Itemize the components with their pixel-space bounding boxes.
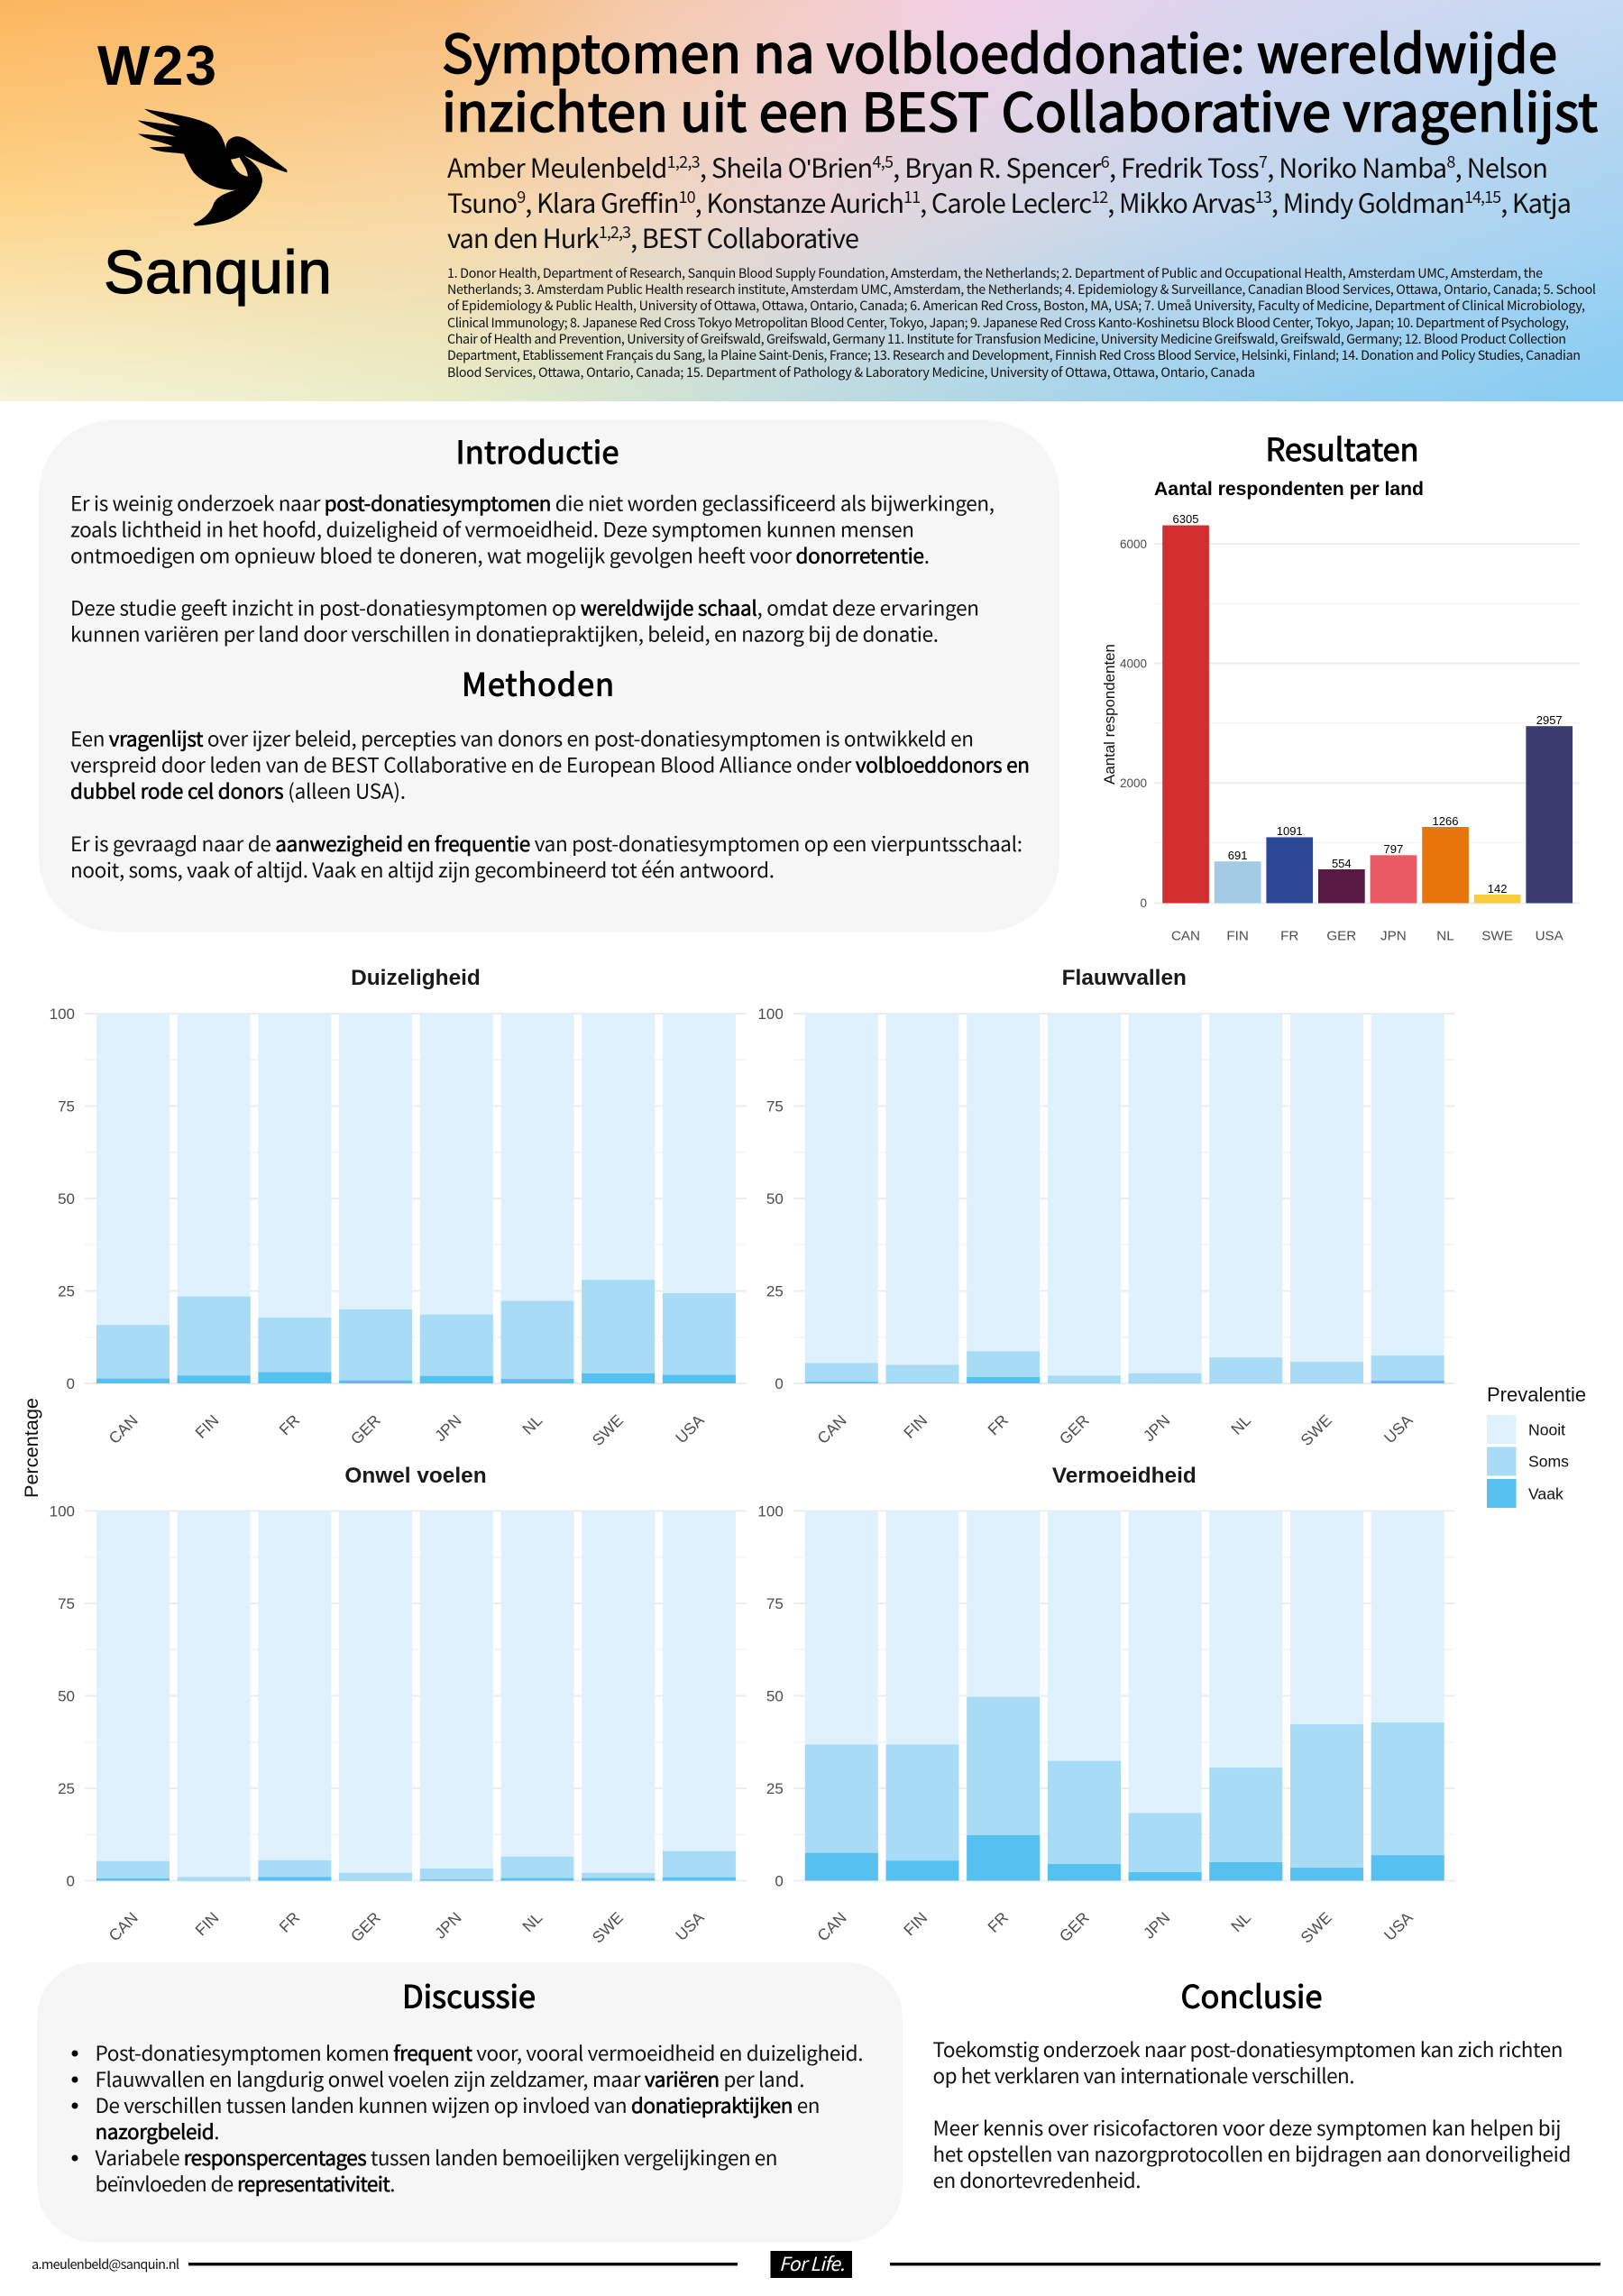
bars: Nooit, Soms, Vaak per land [805, 1511, 1444, 1881]
y axis labels: 75 [58, 1098, 75, 1115]
stacked bar chart: Flauwvallen [757, 966, 1455, 1449]
x axis labels: USA [1536, 929, 1564, 943]
bullet list: discussie: Variabele responspercentages tussen landen bemoeilijken vergelijkingen en [96, 2143, 777, 2172]
x axis labels [813, 1908, 1417, 1947]
affiliations: 1. Donor Health, Department of Research, Sanquin Blood Supply Foundation, Amsterdam, the Netherlands; 2. Department of Public and Occupational Health, Amsterdam UMC, Amsterdam, the [447, 263, 1543, 282]
bullet list: discussie: nazorgbeleid. [96, 2117, 220, 2145]
poster code W23: W23 [97, 35, 216, 97]
title: Symptomen na volbloeddonatie: wereldwijde [442, 13, 1557, 88]
value labels: 554 [1332, 857, 1352, 870]
x axis labels: SWE [1481, 929, 1513, 943]
x axis labels: SWE [589, 1908, 627, 1947]
y axis labels: 100 [50, 1006, 75, 1023]
x axis labels [105, 1410, 708, 1449]
authors: 1,2,3 [599, 220, 631, 243]
text block: conclusie: en donortevredenheid. [932, 2165, 1142, 2194]
x axis labels: NL [518, 1411, 546, 1438]
x axis labels: CAN [105, 1411, 142, 1447]
bullet list: discussie: Post-donatiesymptomen komen frequent voor, vooral vermoeidheid en duizeligheid. [96, 2038, 864, 2067]
heading: Introductie: Introductie [456, 427, 619, 473]
x axis labels: FR [984, 1908, 1012, 1936]
stacked bar chart: Duizeligheid [50, 966, 747, 1449]
panel: introductie en methoden [39, 420, 1059, 932]
icon: Sanquin pelican logo [138, 109, 287, 226]
x axis labels: GER [1326, 929, 1356, 943]
x axis labels: FIN [1226, 929, 1249, 943]
y axis labels: 0 [1140, 896, 1147, 910]
title: inzichten uit een BEST Collaborative vragenlijst [442, 70, 1598, 146]
legend: Prevalentie: Vaak [1528, 1485, 1563, 1503]
x axis labels: FR [276, 1411, 303, 1438]
y axis labels: 2000 [1120, 776, 1147, 790]
bullet list: discussie [72, 2038, 864, 2198]
authors: , Carole Leclerc [920, 183, 1092, 221]
bars: Nooit, Soms, Vaak per land [805, 1014, 1444, 1383]
badge: For Life.: For Life. [779, 2250, 845, 2277]
chart title: Aantal respondenten per land [1154, 479, 1424, 500]
authors: 9 [517, 185, 526, 208]
y axis labels [50, 1006, 75, 1392]
x axis labels: FR [1280, 929, 1298, 943]
y axis labels: 50 [766, 1688, 784, 1704]
y axis labels: 100 [50, 1502, 75, 1520]
text block: conclusie: het opstellen van nazorgprotocollen en bijdragen aan donorveiligheid [932, 2139, 1571, 2168]
authors: 11 [903, 185, 921, 208]
x axis labels: JPN [431, 1908, 465, 1942]
y axis labels: 0 [67, 1375, 75, 1392]
chart title: Vermoeidheid [1052, 1464, 1197, 1488]
x axis labels: USA [672, 1410, 708, 1446]
affiliations: Netherlands; 3. Amsterdam Public Health research institute, Amsterdam UMC, Amsterdam, the Netherlands; 4. Epidemiology & Surveillance, Canadian Blood Services, Ottawa, Ontario, Canada; 5. School [447, 280, 1596, 298]
x axis labels: GER [347, 1908, 384, 1945]
y axis labels [50, 1502, 75, 1890]
authors: , Sheila O'Brien [700, 148, 873, 186]
value labels [1173, 512, 1563, 895]
x axis labels [1171, 929, 1564, 943]
x axis labels: JPN [431, 1411, 465, 1445]
authors: 13 [1255, 185, 1272, 208]
y axis title: Aantal respondenten [1101, 644, 1118, 785]
y axis labels [757, 1502, 784, 1890]
chart title: Onwel voelen [344, 1464, 487, 1488]
header gradient background [0, 0, 1623, 401]
y axis labels [757, 1006, 784, 1392]
y axis labels: 100 [757, 1006, 784, 1023]
authors: 14,15 [1464, 185, 1501, 208]
text block: methoden [70, 723, 1030, 884]
authors: , BEST Collaborative [630, 218, 859, 256]
heading: Discussie: Discussie [402, 1971, 536, 2016]
y axis labels: 25 [766, 1780, 784, 1797]
bullet list: discussie: Flauwvallen en langdurig onwel voelen zijn zeldzamer, maar variëren per land. [96, 2064, 804, 2093]
text block: introductie: zoals lichtheid in het hoofd, duizeligheid of vermoeidheid. Deze symptomen kunnen mensen [70, 514, 914, 543]
x axis labels: NL [1227, 1908, 1254, 1935]
value labels: 2957 [1536, 713, 1563, 727]
chart title: Flauwvallen [1062, 966, 1187, 990]
x axis labels: FR [276, 1908, 303, 1936]
legend: Prevalentie: Nooit [1528, 1421, 1565, 1439]
x axis labels: JPN [1140, 1411, 1173, 1445]
text block: conclusie: Toekomstig onderzoek naar post-donatiesymptomen kan zich richten [932, 2034, 1563, 2063]
bars: Nooit, Soms, Vaak per land [96, 1511, 736, 1881]
y axis labels: 75 [766, 1595, 784, 1612]
authors: Tsuno [447, 183, 518, 221]
stacked bar chart: Onwel voelen [50, 1464, 747, 1947]
authors: , Bryan R. Spencer [893, 148, 1102, 186]
y axis labels: 0 [67, 1872, 75, 1890]
x axis labels: SWE [589, 1411, 627, 1449]
affiliations: Department, Etablissement Français du Sang, la Plaine Saint-Denis, France; 13. Research and Development, Finnish Red Cross Blood Service, Helsinki, Finland; 14. Donation and Policy Studies, Canadian [447, 345, 1581, 364]
text block: methoden: nooit, soms, vaak of altijd. Vaak en altijd zijn gecombineerd tot één antwoord. [70, 855, 775, 884]
y axis labels: 50 [58, 1688, 75, 1704]
authors: , Mikko Arvas [1107, 183, 1256, 221]
x axis labels: NL [1436, 929, 1454, 943]
legend: Prevalentie [1487, 1383, 1586, 1508]
stacked bar chart: Vermoeidheid [757, 1464, 1455, 1947]
x axis labels: FR [984, 1411, 1012, 1438]
chart title: Duizeligheid [351, 966, 481, 990]
footer line right [890, 2263, 1600, 2265]
y axis labels: 25 [58, 1780, 75, 1797]
x axis labels: GER [1056, 1411, 1093, 1448]
x axis labels: SWE [1297, 1411, 1335, 1449]
x axis labels: USA [672, 1908, 708, 1944]
authors: 4,5 [872, 150, 894, 173]
x axis labels: SWE [1297, 1908, 1335, 1947]
value labels: 797 [1384, 842, 1403, 856]
footer: email: a.meulenbeld@sanquin.nl [32, 2255, 179, 2273]
authors: , Nelson [1455, 148, 1548, 186]
x axis labels: USA [1380, 1908, 1417, 1944]
x axis labels: NL [518, 1908, 546, 1935]
text block: methoden: verspreid door leden van de BEST Collaborative en de European Blood Alliance onder volbloeddonors en [70, 750, 1030, 779]
authors: 1,2,3 [667, 150, 701, 173]
authors: Amber Meulenbeld [447, 148, 667, 186]
authors: 12 [1091, 185, 1108, 208]
y axis labels: 25 [58, 1282, 75, 1300]
bar chart: aantal respondenten per land [1101, 479, 1580, 943]
authors: 6 [1101, 150, 1110, 173]
affiliations [447, 263, 1596, 381]
x axis labels: CAN [1171, 929, 1200, 943]
authors: 10 [679, 185, 696, 208]
y axis labels: 50 [58, 1190, 75, 1208]
authors: , Noriko Namba [1267, 148, 1447, 186]
authors: , Konstanze Aurich [695, 183, 904, 221]
authors: 8 [1446, 150, 1455, 173]
authors: , Klara Greffin [525, 183, 680, 221]
affiliations: Chair of Health and Prevention, University of Greifswald, Greifswald, Germany 11. Institute for Transfusion Medicine, University Medicine Greifswald, Greifswald, Germany; 12. Blood Product Collection [447, 329, 1566, 348]
text block: methoden: dubbel rode cel donors (alleen USA). [70, 776, 406, 804]
value labels: 6305 [1173, 512, 1198, 526]
x axis labels: USA [1380, 1410, 1417, 1446]
text block: introductie: kunnen variëren per land door verschillen in donatiepraktijken, beleid, en nazorg bij de donatie. [70, 619, 939, 647]
title [442, 13, 1598, 146]
x axis labels [813, 1410, 1417, 1449]
panel: discussie [37, 1962, 903, 2242]
authors: , Katja [1500, 183, 1572, 221]
x axis labels: FIN [191, 1411, 223, 1442]
authors: , Mindy Goldman [1271, 183, 1465, 221]
text block: introductie: ontmoedigen om opnieuw bloed te doneren, wat mogelijk gevolgen heeft voor donorretentie. [70, 541, 930, 570]
value labels: 1266 [1433, 814, 1458, 828]
x axis labels: JPN [1140, 1908, 1173, 1942]
x axis labels: JPN [1380, 929, 1407, 943]
x axis labels: FIN [900, 1411, 931, 1442]
footer line left [188, 2263, 738, 2265]
value labels: 1091 [1277, 824, 1303, 838]
affiliations: Blood Services, Ottawa, Ontario, Canada; 15. Department of Pathology & Laboratory Medicine, University of Ottawa, Ottawa, Ontario, Canada [447, 363, 1255, 381]
bars [1162, 525, 1573, 904]
heading: Methoden: Methoden [462, 660, 614, 705]
text block: conclusie [932, 2034, 1571, 2194]
Sanquin wordmark: Sanquin [104, 238, 332, 307]
x axis labels: CAN [813, 1411, 850, 1447]
y axis labels: 100 [757, 1502, 784, 1520]
y axis labels: 50 [766, 1190, 784, 1208]
y axis labels: 75 [58, 1595, 75, 1612]
text block: conclusie: Meer kennis over risicofactoren voor deze symptomen kan helpen bij [932, 2113, 1562, 2142]
bullet list: discussie: De verschillen tussen landen kunnen wijzen op invloed van donatiepraktijken en [96, 2090, 821, 2119]
affiliations: Clinical Immunology; 8. Japanese Red Cross Tokyo Metropolitan Blood Center, Tokyo, Japan; 9. Japanese Red Cross Kanto-Koshinetsu Block Blood Center, Tokyo, Japan; 10. Department of Psychology, [447, 313, 1569, 332]
x axis labels: CAN [105, 1908, 142, 1944]
text block: introductie [70, 489, 995, 647]
bullet list: discussie: beïnvloeden de representativiteit. [96, 2169, 395, 2198]
y axis labels: 75 [766, 1098, 784, 1115]
text block: introductie: Er is weinig onderzoek naar post-donatiesymptomen die niet worden geclassificeerd als bijwerkingen, [70, 489, 995, 518]
text block: methoden: Een vragenlijst over ijzer beleid, percepties van donors en post-donatiesymptomen is ontwikkeld en [70, 723, 974, 752]
value labels: 142 [1488, 882, 1507, 895]
authors: , Fredrik Toss [1109, 148, 1260, 186]
x axis labels: NL [1227, 1411, 1254, 1438]
x axis labels [105, 1908, 708, 1947]
y axis labels: 0 [775, 1872, 784, 1890]
heading: Conclusie: Conclusie [1181, 1971, 1322, 2016]
authors: 7 [1259, 150, 1268, 173]
text block: methoden: Er is gevraagd naar de aanwezigheid en frequentie van post-donatiesymptomen op een vierpuntsschaal: [70, 829, 1022, 858]
x axis labels: GER [347, 1411, 384, 1448]
text block: conclusie: op het verklaren van internationale verschillen. [932, 2061, 1354, 2089]
y axis title: Percentage: Percentage [20, 1398, 42, 1498]
y axis labels [1120, 537, 1147, 910]
legend: Prevalentie: Soms [1528, 1453, 1569, 1471]
x axis labels: GER [1056, 1908, 1093, 1945]
authors: van den Hurk [447, 218, 600, 256]
y axis labels: 6000 [1120, 537, 1147, 551]
y axis labels: 4000 [1120, 657, 1147, 671]
y axis labels: 25 [766, 1282, 784, 1300]
text block: introductie: Deze studie geeft inzicht in post-donatiesymptomen op wereldwijde schaal, omdat deze ervaringen [70, 593, 979, 622]
heading: Resultaten: Resultaten [1266, 425, 1419, 470]
x axis labels: CAN [813, 1908, 850, 1944]
bars: Nooit, Soms, Vaak per land [96, 1014, 736, 1383]
affiliations: of Epidemiology & Public Health, University of Ottawa, Ottawa, Ontario, Canada; 6. American Red Cross, Boston, MA, USA; 7. Umeå University, Faculty of Medicine, Department of Clinical Microbiology, [447, 296, 1585, 315]
legend: Prevalentie: Prevalentie [1487, 1383, 1586, 1406]
x axis labels: FIN [900, 1908, 931, 1939]
x axis labels: FIN [191, 1908, 223, 1939]
y axis labels: 0 [775, 1375, 784, 1392]
authors [447, 148, 1572, 256]
value labels: 691 [1228, 849, 1247, 862]
